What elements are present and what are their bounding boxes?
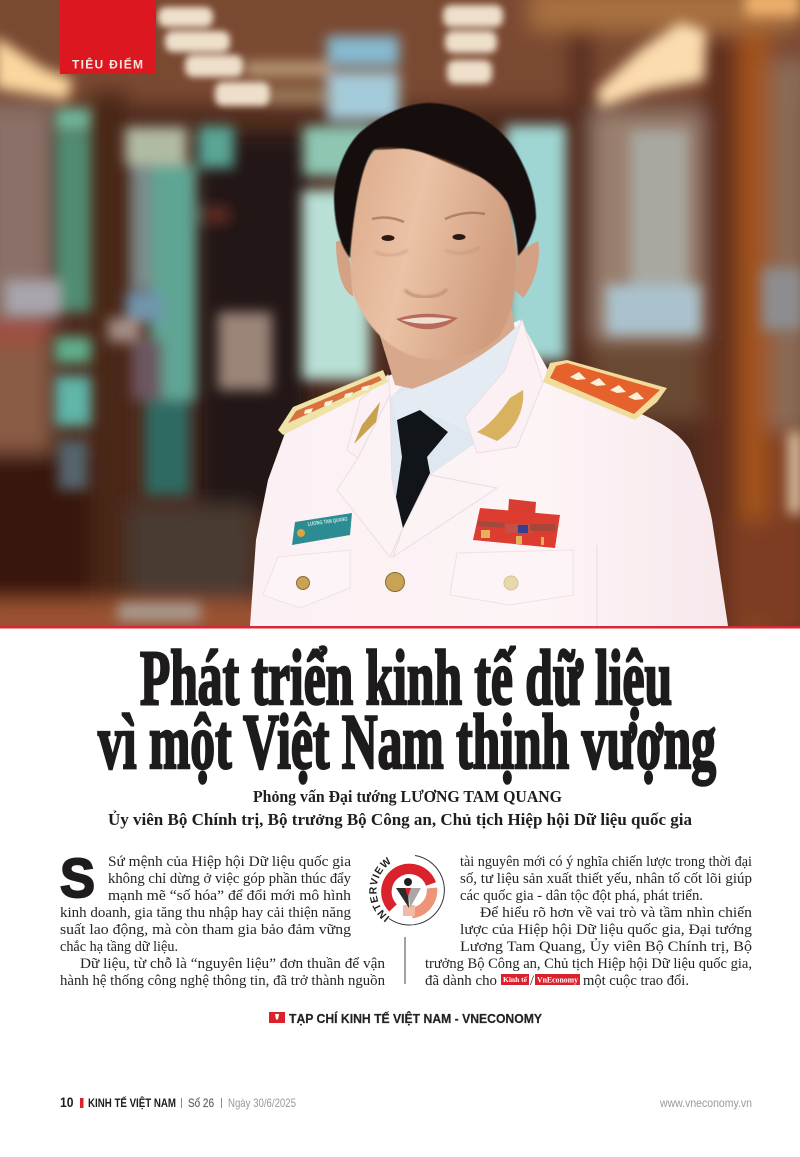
right pocket flap: [450, 550, 573, 605]
intro text: left column: mạnh mẽ “số hóa” để đổi mới mô hình: [108, 888, 351, 904]
shirt collar: [392, 323, 520, 396]
drop cap S: S: [60, 847, 95, 909]
intro text: left column: kinh doanh, gia tăng thu nhập hay cải thiện năng: [60, 905, 351, 921]
salmon ring: [412, 888, 432, 913]
footer: www.vneconomy.vn: [659, 1096, 752, 1110]
subheading: interviewee: Ủy viên Bộ Chính trị, Bộ trưởng Bộ Công an, Chủ tịch Hiệp hội Dữ liệu quốc gia: [108, 810, 692, 829]
intro text: right column: tài nguyên mới có ý nghĩa chiến lược trong thời đại: [460, 854, 752, 870]
intro text: left column: Dữ liệu, từ chỗ là “nguyên liệu” đơn thuần để vận: [80, 956, 385, 972]
subheading: interviewee: [108, 787, 692, 829]
intro text: right column: một cuộc trao đổi.: [583, 973, 689, 989]
shirt: [390, 386, 474, 496]
medal ribbons: [473, 499, 560, 548]
gold collar leaf right: [477, 390, 523, 441]
intro text: left column: không chỉ dừng ở việc góp phần thúc đẩy: [108, 871, 352, 887]
photo: man in white uniform: [250, 103, 728, 626]
eyebrows: [372, 213, 485, 222]
left epaulet: [278, 370, 388, 435]
intro text: left column: hành hệ thống công nghệ thông tin, đã trở thành nguồn: [60, 973, 385, 989]
intro text: left column: chắc hạ tầng dữ liệu.: [60, 939, 178, 955]
interview badge: [369, 855, 445, 926]
subheading: interviewee: Phỏng vấn Đại tướng LƯƠNG TAM QUANG: [253, 787, 562, 806]
footer: Ngày 30/6/2025: [228, 1096, 296, 1110]
section tag: TIÊU ĐIỂM: TIÊU ĐIỂM: [72, 56, 143, 72]
jacket: [250, 320, 728, 626]
byline: TẠP CHÍ KINH TẾ VIỆT NAM - VNECONOMY: [289, 1011, 542, 1026]
footer: [60, 1094, 752, 1110]
name plate: LƯƠNG TAM QUANG: [307, 516, 348, 528]
eyes: [382, 234, 466, 241]
section tag: TIÊU ĐIỂM: [60, 0, 156, 74]
face: [350, 148, 517, 359]
intro text: right column: Để hiểu rõ hơn về vai trò và tầm nhìn chiến: [480, 905, 752, 921]
nose: [405, 289, 447, 297]
headline: [98, 634, 716, 785]
sleeve seam: [596, 545, 598, 626]
intro text: right column: các quốc gia - dân tộc đột phá, phát triển.: [460, 888, 703, 904]
name plate: [292, 513, 352, 545]
right epaulet: [543, 360, 667, 420]
left pocket flap: [263, 550, 350, 608]
gold collar leaf left: [354, 402, 380, 444]
right lapel: [393, 475, 497, 557]
intro text: right column: VnEconomy: [537, 976, 578, 984]
red rule under photo: [0, 626, 800, 628]
ears: [336, 241, 539, 298]
photo: blurred corridor background: [0, 0, 800, 640]
footer: Số 26: [188, 1096, 214, 1110]
figure head: [404, 878, 412, 886]
column divider: [404, 937, 406, 984]
footer: 10: [60, 1094, 74, 1110]
bulb base: [403, 905, 415, 916]
figure V: [396, 888, 409, 908]
uniform collar left: [347, 375, 390, 458]
eye shadows: [375, 247, 480, 256]
intro text: right column: trưởng Bộ Công an, Chủ tịch Hiệp hội Dữ liệu quốc gia,: [425, 956, 752, 972]
uniform collar right: [465, 320, 543, 453]
intro text: right column: [425, 854, 752, 989]
black tie: [396, 410, 448, 528]
intro text: left column: suất lao động, mà còn tham gia bảo đảm vững: [60, 922, 351, 938]
intro text: right column: đã dành cho: [425, 973, 497, 989]
intro text: left column: [60, 854, 385, 989]
intro text: right column: /: [530, 973, 534, 989]
buttons: [296, 572, 518, 592]
hair: [334, 103, 536, 258]
mouth: [396, 314, 458, 329]
intro text: right column: lược của Hiệp hội Dữ liệu quốc gia, Đại tướng: [460, 922, 752, 938]
thin arc: [389, 856, 444, 925]
INTERVIEW text on arc: INTERVIEW: [369, 856, 390, 922]
intro text: left column: Sứ mệnh của Hiệp hội Dữ liệu quốc gia: [108, 854, 352, 870]
intro text: right column: Lương Tam Quang, Ủy viên Bộ Chính trị, Bộ: [460, 938, 752, 955]
footer: KINH TẾ VIỆT NAM: [88, 1095, 176, 1110]
left lapel: [337, 395, 403, 557]
intro text: right column: số, tư liệu sản xuất thiết yếu, nhân tố cốt lõi giúp: [460, 871, 752, 887]
neck: [380, 307, 515, 389]
byline icon: [269, 1012, 285, 1023]
red ring: [386, 869, 431, 908]
intro text: right column: Kinh tế: [503, 976, 528, 984]
